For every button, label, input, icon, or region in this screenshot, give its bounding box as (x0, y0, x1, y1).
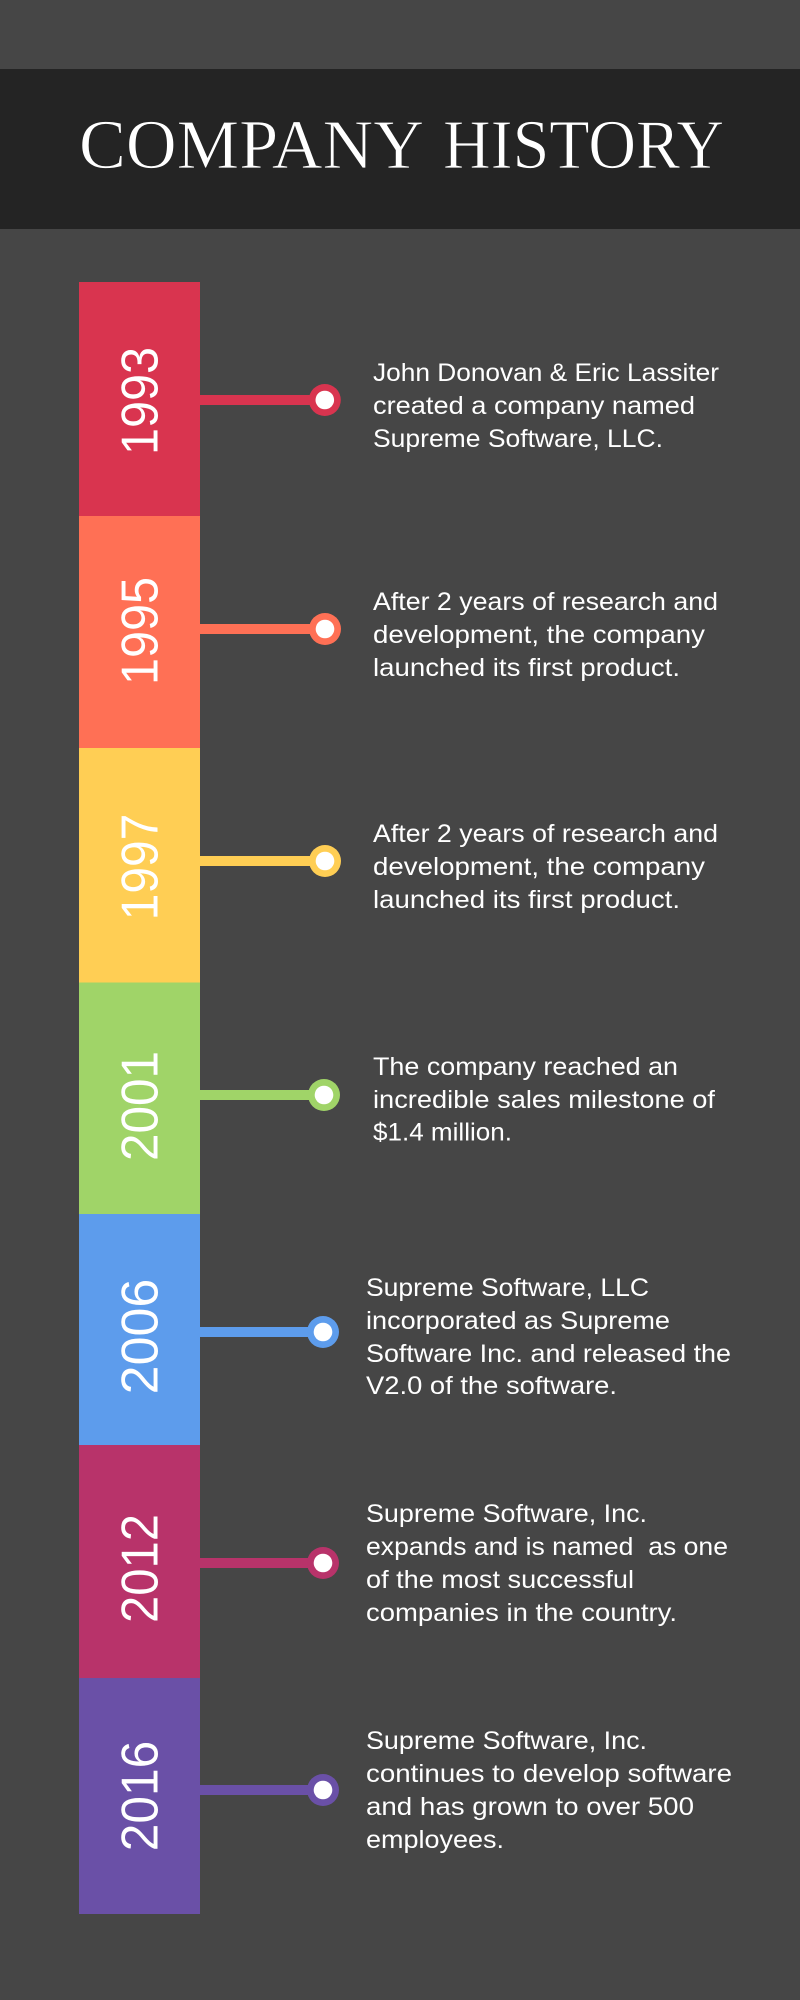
year block 1997 (79, 748, 200, 982)
timeline entry: 2006 (79, 1214, 731, 1445)
description 1995: development, the company (373, 621, 706, 649)
description 2006: V2.0 of the software. (366, 1372, 617, 1400)
description 1995: launched its first product. (373, 654, 680, 682)
year block 1993: 1993 (112, 347, 170, 455)
connector and node 1997 (200, 845, 341, 877)
description 1997 (373, 820, 718, 914)
description 2012: companies in the country. (366, 1599, 677, 1627)
title: HISTORY (443, 107, 724, 184)
description 2006: Supreme Software, LLC (366, 1274, 649, 1302)
description 2006: Software Inc. and released the (366, 1340, 731, 1368)
year block 2001: 2001 (112, 1051, 170, 1161)
connector and node 2006 (200, 1316, 339, 1348)
description 1997: development, the company (373, 853, 706, 881)
connector and node 1993 (200, 384, 341, 416)
description 2012: expands and is named as one (366, 1533, 728, 1561)
timeline entry: 2016 (79, 1678, 732, 1914)
title (79, 107, 724, 184)
year block 1995: 1995 (112, 577, 170, 685)
description 2006 (366, 1274, 731, 1400)
year block 2016 (79, 1678, 200, 1914)
year block 2012: 2012 (112, 1514, 170, 1623)
connector and node 2016 (200, 1774, 339, 1806)
timeline entry: 1997 (79, 748, 718, 982)
description 1993: John Donovan & Eric Lassiter (373, 359, 719, 387)
year block 2006 (79, 1214, 200, 1445)
description 1993 (373, 359, 719, 453)
description 2016: Supreme Software, Inc. (366, 1727, 647, 1755)
description 1995 (373, 588, 718, 682)
description 2016: continues to develop software (366, 1760, 732, 1788)
description 2016: and has grown to over 500 (366, 1793, 694, 1821)
description 2001: incredible sales milestone of (373, 1086, 715, 1114)
timeline entry: 1993 (79, 282, 719, 516)
description 2016 (366, 1727, 732, 1854)
year block 2012 (79, 1445, 200, 1678)
description 1997: After 2 years of research and (373, 820, 718, 848)
description 1997: launched its first product. (373, 886, 680, 914)
title: COMPANY (79, 107, 424, 184)
year block 1995 (79, 516, 200, 748)
description 2001 (373, 1053, 715, 1146)
year block 2001 (79, 982, 200, 1215)
timeline entry: 2012 (79, 1445, 728, 1678)
timeline entry: 1995 (79, 516, 718, 748)
description 2001: $1.4 million. (373, 1118, 512, 1146)
connector and node 1995 (200, 613, 341, 645)
year block 2016: 2016 (112, 1741, 170, 1851)
description 1993: created a company named (373, 392, 695, 420)
description 2001: The company reached an (373, 1053, 678, 1081)
header band with title (0, 69, 800, 229)
timeline entry: 2001 (79, 982, 715, 1215)
year block 1997: 1997 (112, 814, 170, 920)
description 2016: employees. (366, 1826, 504, 1854)
description 2012: of the most successful (366, 1566, 634, 1594)
description 1993: Supreme Software, LLC. (373, 425, 663, 453)
year block 1993 (79, 282, 200, 516)
description 2012 (366, 1500, 728, 1627)
connector and node 2012 (200, 1547, 339, 1579)
description 2006: incorporated as Supreme (366, 1307, 670, 1335)
year block 2006: 2006 (112, 1279, 170, 1394)
connector and node 2001 (200, 1079, 340, 1111)
description 2012: Supreme Software, Inc. (366, 1500, 647, 1528)
description 1995: After 2 years of research and (373, 588, 718, 616)
